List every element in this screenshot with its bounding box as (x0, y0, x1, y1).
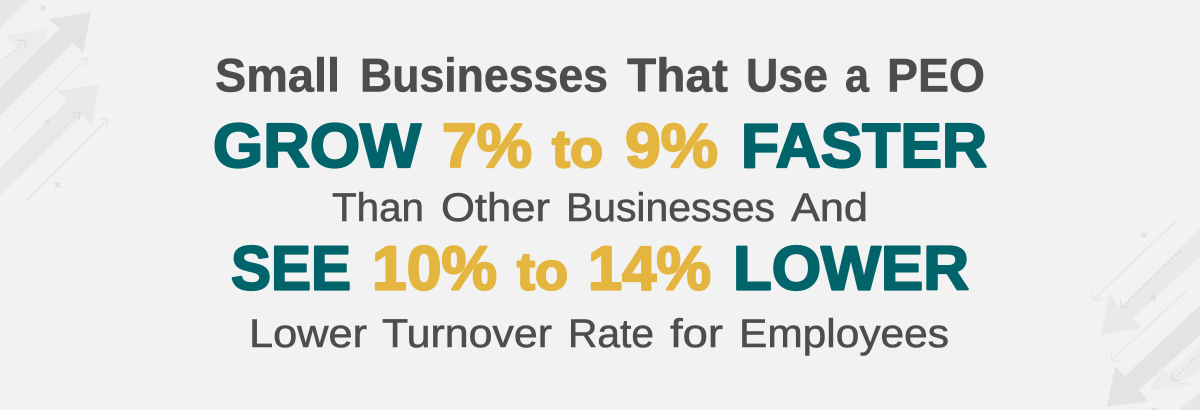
icon: dashed arrow upper (0, 40, 26, 63)
headline: SEE 10% to 14% LOWER: 14% (588, 234, 711, 304)
headline: GROW 7% to 9% FASTER: 7% (442, 112, 532, 181)
heading line: Small Businesses That Use a PEO: Small (215, 48, 340, 102)
headline: GROW 7% to 9% FASTER: FASTER (741, 112, 987, 181)
icon: cross marks (40, 6, 60, 188)
icon: thin arrow upper (13, 58, 87, 132)
icon: thin arrow lower (27, 119, 108, 200)
heading line: Small Businesses That Use a PEO: a (845, 48, 870, 102)
bottom-right decorative arrows (1093, 220, 1200, 410)
headline: GROW 7% to 9% FASTER: 9% (625, 112, 718, 181)
text line: Than Other Businesses And: Businesses (566, 186, 775, 230)
headline: SEE 10% to 14% LOWER (231, 234, 969, 304)
text line: Lower Turnover Rate for Employees (249, 312, 949, 356)
icon: pale arrow (1150, 345, 1200, 391)
heading line: Small Businesses That Use a PEO: That (627, 48, 728, 102)
headline: GROW 7% to 9% FASTER: GROW (213, 112, 421, 181)
icon: medium arrow (0, 84, 99, 196)
icon: upper arrow (1101, 228, 1200, 335)
icon: large lower arrow (1107, 305, 1200, 407)
headline: GROW 7% to 9% FASTER (213, 112, 987, 181)
icon: thin arrow upper (1093, 220, 1177, 300)
icon: cross marks (1142, 232, 1156, 410)
text line: Lower Turnover Rate for Employees: for (670, 312, 723, 356)
headline: SEE 10% to 14% LOWER: LOWER (733, 234, 969, 304)
text line: Lower Turnover Rate for Employees: Lower (249, 312, 367, 356)
text line: Lower Turnover Rate for Employees: Turnover (382, 312, 552, 356)
headline: SEE 10% to 14% LOWER: SEE (231, 234, 351, 304)
icon: thin arrow lower (1111, 289, 1188, 361)
text line: Than Other Businesses And (332, 186, 868, 230)
headline: GROW 7% to 9% FASTER: to (552, 120, 603, 179)
icon: dashed arrow lower (19, 112, 80, 171)
heading line: Small Businesses That Use a PEO: PEO (887, 48, 985, 102)
heading line: Small Businesses That Use a PEO: Use (746, 48, 828, 102)
text line: Than Other Businesses And: Than (332, 186, 424, 230)
icon: large arrow (0, 12, 91, 116)
headline: SEE 10% to 14% LOWER: 10% (372, 234, 497, 304)
icon: dashed arrow upper (1121, 249, 1182, 308)
heading line: Small Businesses That Use a PEO: Businesses (360, 48, 608, 102)
text line: Lower Turnover Rate for Employees: Employees (739, 312, 949, 356)
headline: SEE 10% to 14% LOWER: to (517, 242, 568, 302)
text line: Lower Turnover Rate for Employees: Rate (568, 312, 654, 356)
top-left decorative arrows (0, 0, 108, 200)
text line: Than Other Businesses And: And (791, 186, 868, 230)
heading line: Small Businesses That Use a PEO (215, 48, 985, 102)
icon: dashed arrow lower (1172, 354, 1200, 381)
text line: Than Other Businesses And: Other (441, 186, 550, 230)
icon: small pale arrow (0, 29, 47, 88)
